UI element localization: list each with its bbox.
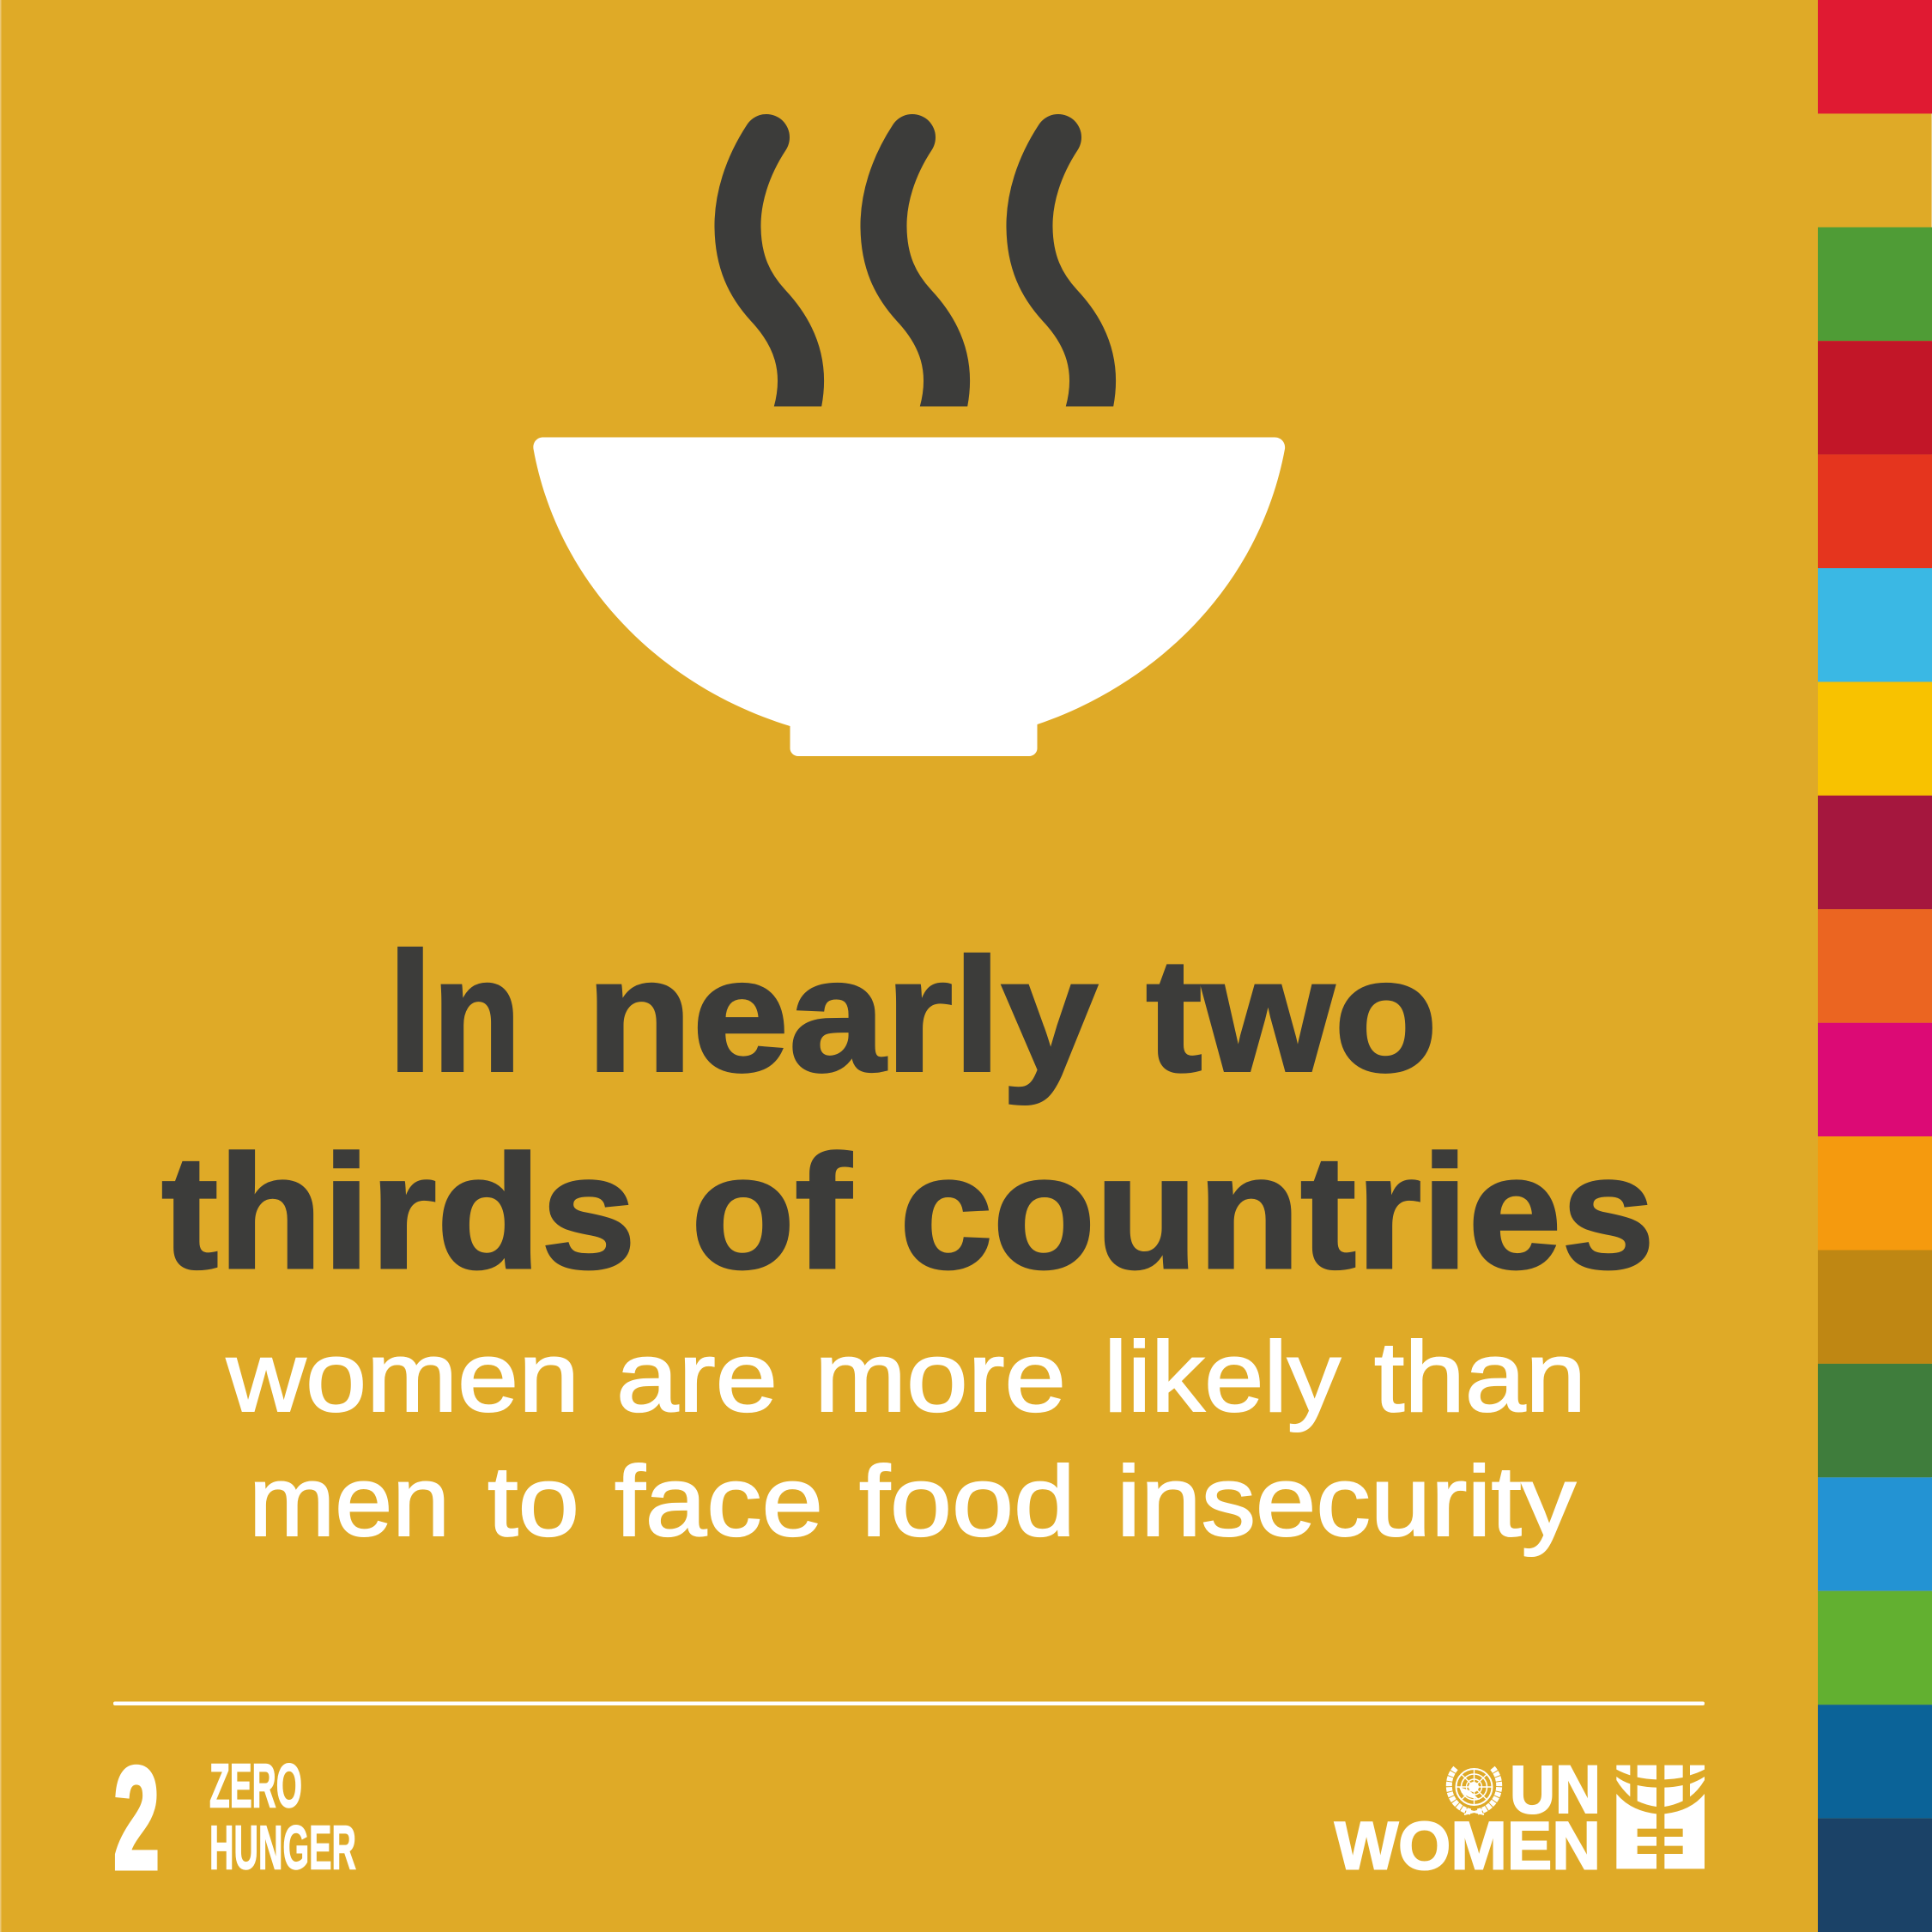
logo: UN Women: UN xyxy=(1510,1751,1601,1827)
text block: subtitle: women xyxy=(226,1321,579,1432)
logo: UN Women: WOMEN xyxy=(1335,1808,1601,1883)
text block: goal name: HUNGER xyxy=(209,1814,356,1883)
title: main statement: countries xyxy=(899,1122,1655,1302)
icon: UN emblem xyxy=(1449,1768,1499,1814)
text block: subtitle: insecurity xyxy=(1117,1445,1576,1557)
title: main statement: thirds xyxy=(161,1122,636,1302)
text block: subtitle: more xyxy=(815,1321,1066,1432)
title: main statement: of xyxy=(691,1122,851,1302)
text block: goal name: ZERO xyxy=(209,1753,302,1821)
text block: subtitle: men xyxy=(249,1445,450,1557)
icon: UN Women symbol xyxy=(1616,1765,1705,1868)
text block: subtitle: are xyxy=(616,1321,778,1432)
title: main statement: two xyxy=(1146,925,1438,1105)
title: main statement: nearly xyxy=(586,925,1098,1105)
text block: subtitle: likely xyxy=(1104,1321,1341,1432)
icon: steam rising from bowl xyxy=(737,137,1093,421)
text block: subtitle: than xyxy=(1374,1321,1586,1432)
text block: subtitle: face xyxy=(615,1445,823,1557)
title: main statement: In xyxy=(388,910,521,1109)
text block: subtitle: food xyxy=(859,1445,1075,1557)
panel: SDG colour strip xyxy=(1818,0,1932,1932)
text block: subtitle: to xyxy=(488,1445,579,1557)
logo: UN Women xyxy=(1335,1751,1705,1883)
icon: white bowl xyxy=(533,438,1285,756)
text block: goal name xyxy=(209,1753,356,1883)
title: main statement xyxy=(161,910,1655,1302)
text block: subtitle xyxy=(226,1321,1586,1557)
icon: SDG goal number 2: 2 xyxy=(113,1737,160,1900)
